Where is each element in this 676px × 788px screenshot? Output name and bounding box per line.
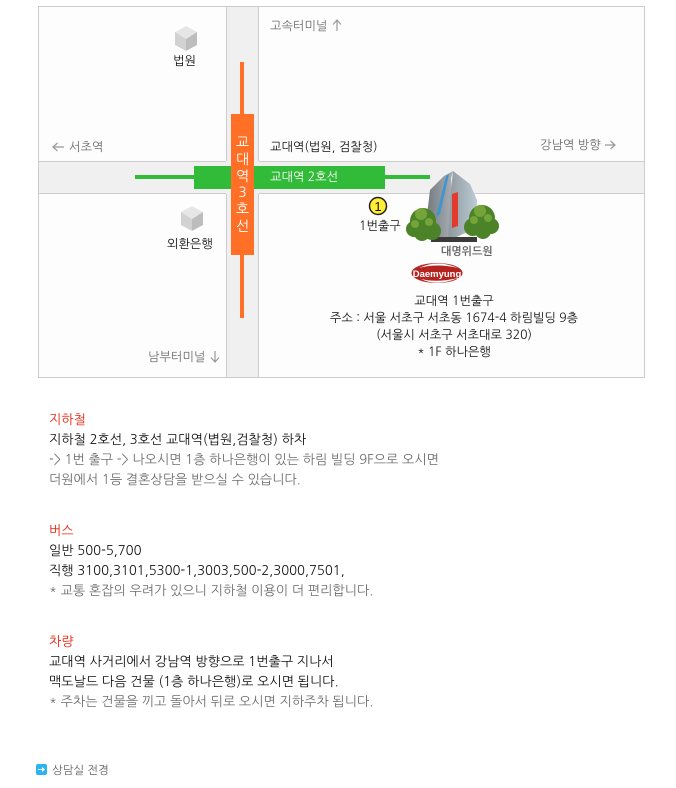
section: subway: 지하철 2호선, 3호선 교대역(볍원,검찰청) 하차 <box>49 433 306 446</box>
address block: * 1F 하나은행 <box>417 346 491 358</box>
section: car: 차량 <box>49 635 74 648</box>
section: bus <box>49 524 373 597</box>
link: counseling room view: 상담실 전경 <box>52 764 109 776</box>
section: car: 교대역 사거리에서 강남역 방향으로 1번출구 지나서 <box>49 655 334 668</box>
section: bus: 일반 500-5,700 <box>49 544 142 557</box>
icon: court cube <box>174 23 198 53</box>
address block: 주소 : 서울 서초구 서초동 1674-4 하림빌딩 9층 <box>330 312 578 324</box>
arrow: left to Seocho <box>53 143 64 151</box>
label: exit 1: 1번출구 <box>359 220 401 232</box>
label: line 3: 호 <box>236 203 249 217</box>
section: car: 맥도날드 다음 건물 (1층 하나은행)로 오시면 됩니다. <box>49 675 339 688</box>
label: line 3: 교 <box>236 136 249 150</box>
section: subway <box>49 413 439 486</box>
label: building name: 대명위드원 <box>441 246 493 257</box>
icon: bank cube <box>180 203 204 233</box>
subway line 3 <box>231 62 254 318</box>
label: line 3: 대 <box>236 153 249 167</box>
icon: exit 1 badge: 1 <box>374 199 382 214</box>
section: subway: 더원에서 1등 결혼상담을 받으실 수 있습니다. <box>49 473 301 486</box>
section: bus: 버스 <box>49 524 74 537</box>
section: subway: 지하철 <box>49 413 86 426</box>
address block <box>330 294 578 358</box>
vertical road <box>226 7 259 377</box>
icon: building with trees <box>406 171 499 242</box>
address block: (서울시 서초구 서초대로 320) <box>376 329 532 341</box>
section: car: * 주차는 건물을 끼고 돌아서 뒤로 오시면 지하주차 됩니다. <box>49 695 373 708</box>
label: court: 법원 <box>173 55 196 67</box>
label: line 3: 3 <box>238 186 247 200</box>
icon: arrow bullet <box>36 764 47 775</box>
arrow: down to Nambu terminal <box>211 351 219 362</box>
label: Nambu terminal: 남부터미널 <box>148 351 205 363</box>
icon: Daemyung logo <box>412 263 462 283</box>
label: Gyodae station court side: 교대역(법원, 검찰청) <box>270 141 378 153</box>
label: line 2: 교대역 2호선 <box>270 171 338 183</box>
arrow: right to Gangnam <box>605 141 615 149</box>
label: Seocho station: 서초역 <box>69 141 103 153</box>
map panel <box>38 6 645 378</box>
label: line 3: 선 <box>236 220 249 234</box>
label: express bus terminal: 고속터미널 <box>270 20 327 32</box>
address block: 교대역 1번출구 <box>414 295 494 307</box>
horizontal road <box>39 161 644 194</box>
subway line 2 <box>135 166 430 189</box>
section: bus: 직행 3100,3101,5300-1,3003,500-2,3000,7501, <box>49 564 345 577</box>
label: exchange bank: 외환은행 <box>167 238 213 250</box>
section: subway: -> 1번 출구 -> 나오시면 1층 하나은행이 있는 하림 빌딩 9F으로 오시면 <box>49 453 439 466</box>
label: line 3 <box>236 136 249 234</box>
icon: exit 1 badge <box>370 198 386 214</box>
arrow: up to express terminal <box>333 20 341 31</box>
section: bus: * 교통 혼잡의 우려가 있으니 지하철 이용이 더 편리합니다. <box>49 584 373 597</box>
icon: Daemyung logo: Daemyung <box>413 269 461 280</box>
section: car <box>49 635 373 708</box>
label: toward Gangnam: 강남역 방향 <box>540 139 601 151</box>
label: line 3: 역 <box>236 170 249 184</box>
